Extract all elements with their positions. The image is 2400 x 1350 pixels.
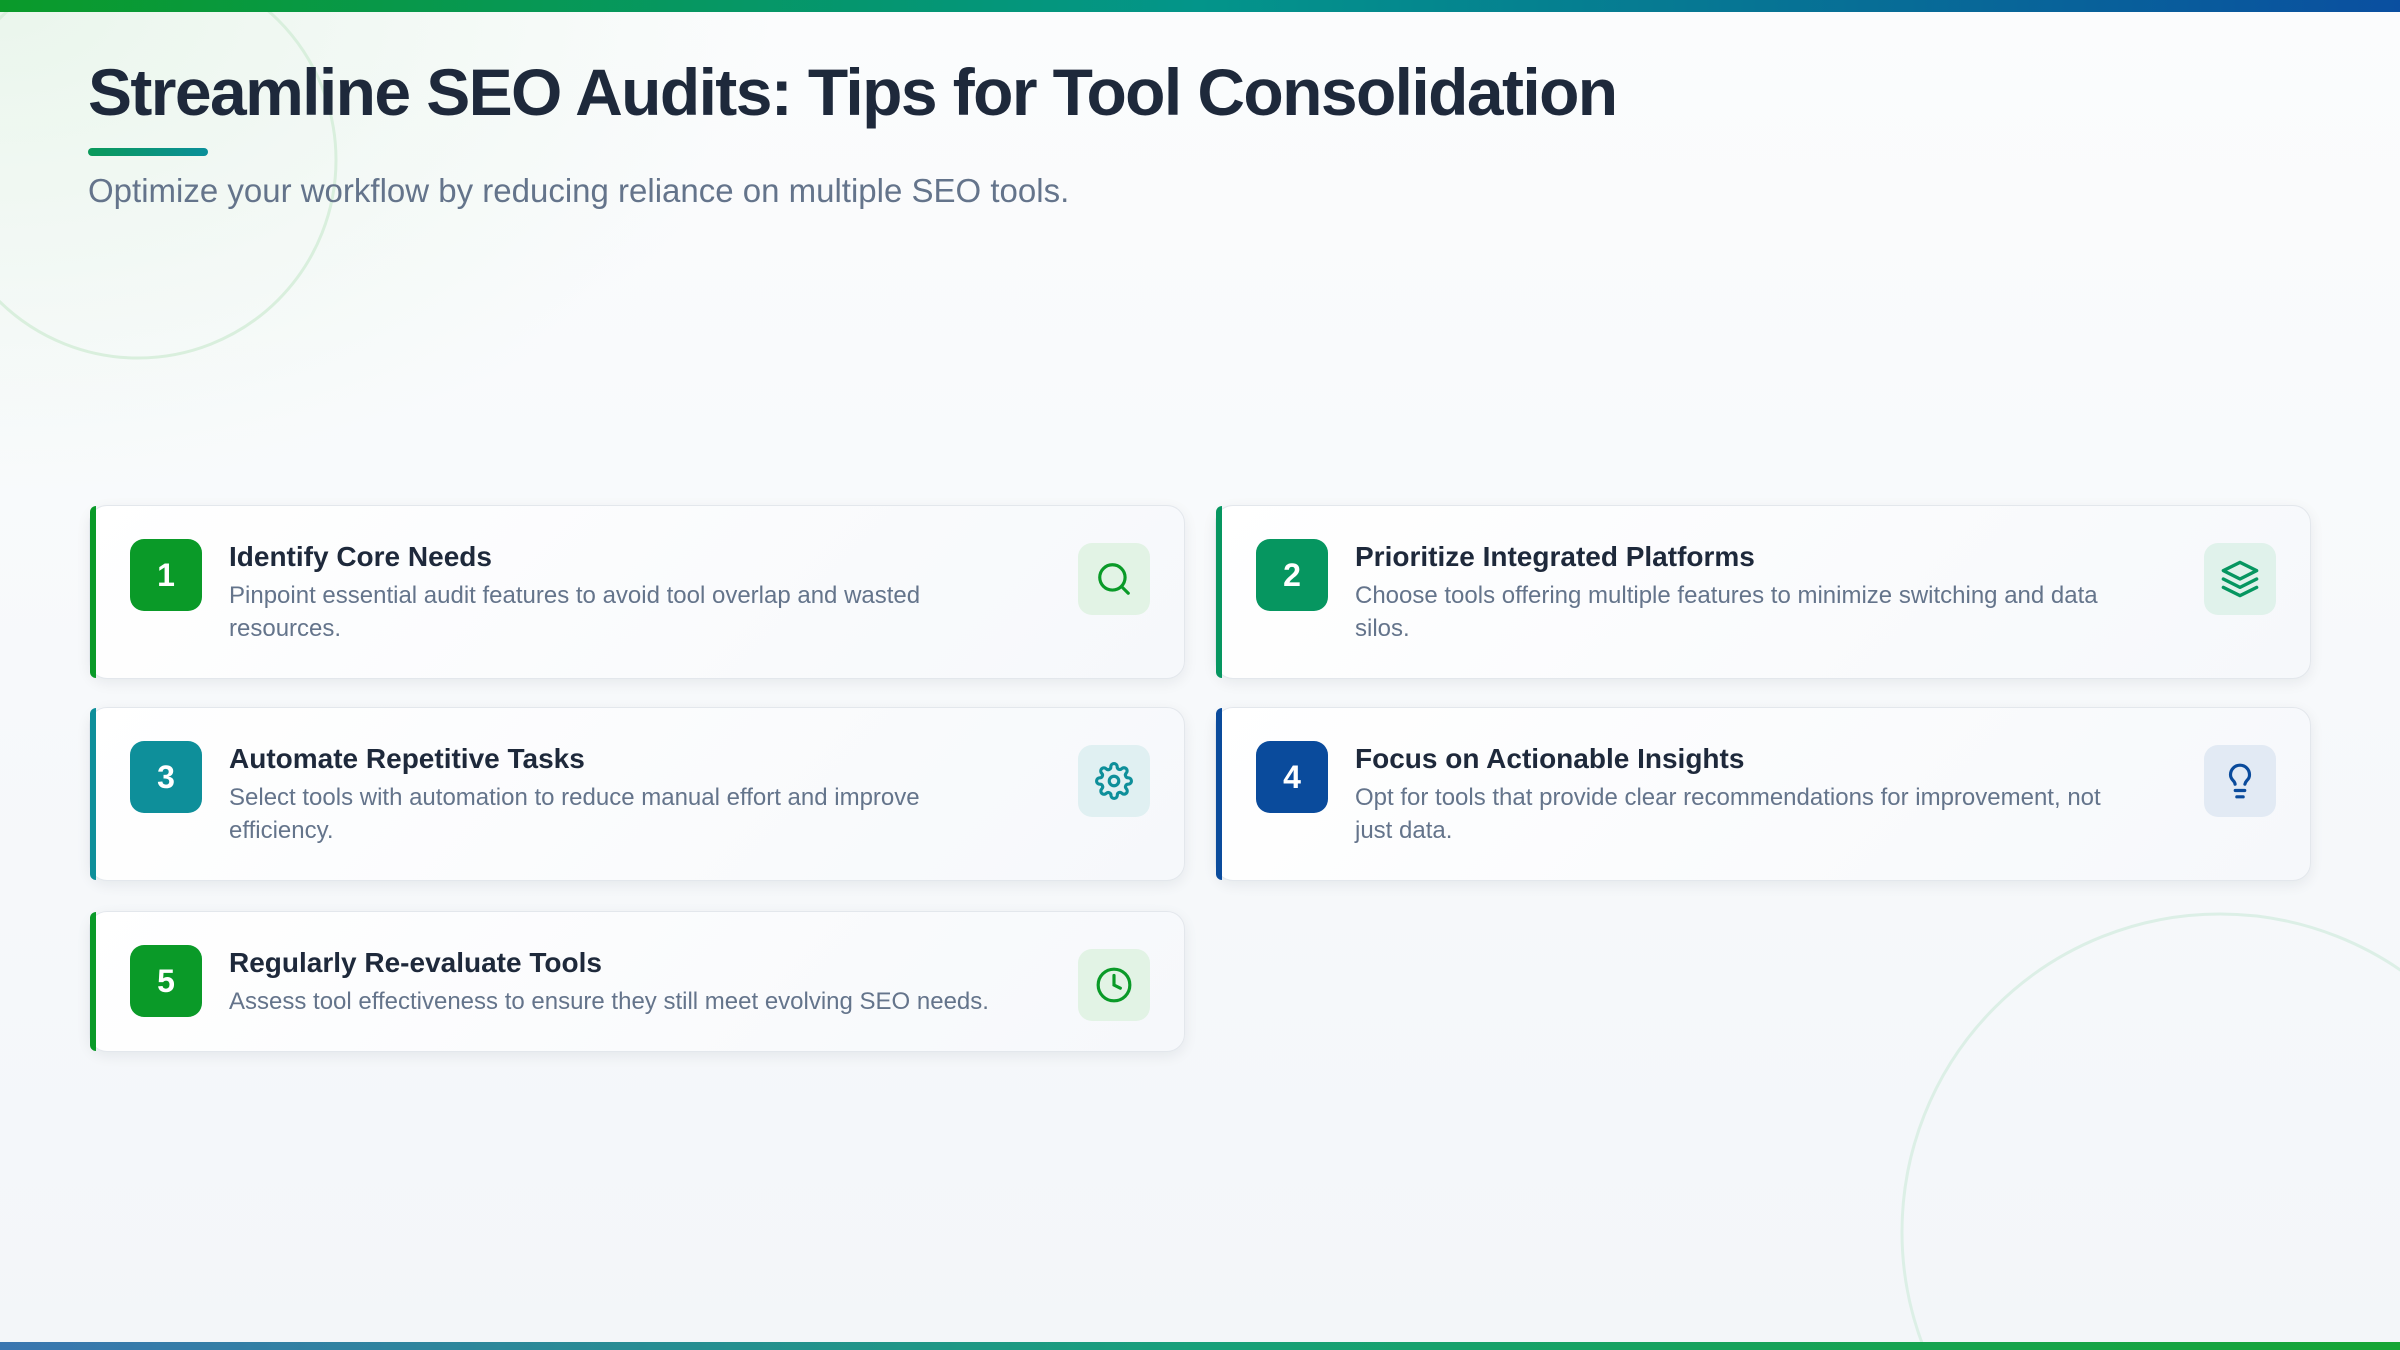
text 5: Regularly Re-evaluate Tools (229, 947, 602, 978)
icon: gear (1078, 745, 1150, 817)
badge 5 (130, 945, 202, 1017)
text 3: Select tools with automation to reduce manual effort and improve (229, 784, 920, 811)
text 5: Assess tool effectiveness to ensure they still meet evolving SEO needs. (229, 988, 989, 1015)
card 4: Focus on Actionable Insights (1215, 707, 2311, 881)
text 2 (1355, 541, 2098, 642)
icon: clock (1078, 949, 1150, 1021)
text 3: efficiency. (229, 817, 334, 844)
card 3: Automate Repetitive Tasks (89, 707, 1185, 881)
text 2: Prioritize Integrated Platforms (1355, 541, 1755, 572)
badge 5: 5 (157, 962, 175, 998)
text 1: Identify Core Needs (229, 541, 492, 572)
text 4: just data. (1355, 817, 1452, 844)
text 3: Automate Repetitive Tasks (229, 743, 585, 774)
icon: layers (2204, 543, 2276, 615)
card 5: Regularly Re-evaluate Tools (89, 911, 1185, 1052)
text 2: Choose tools offering multiple features to minimize switching and data (1355, 582, 2098, 609)
text 1 (229, 541, 920, 642)
badge 1: 1 (157, 556, 175, 592)
icon: search (1078, 543, 1150, 615)
badge 2 (1256, 539, 1328, 611)
badge 1 (130, 539, 202, 611)
text 3 (229, 743, 920, 844)
text 4 (1354, 743, 2101, 844)
subtitle: Optimize your workflow by reducing reliance on multiple SEO tools. (88, 172, 1069, 209)
text 2: silos. (1355, 615, 1410, 642)
badge 4: 4 (1283, 758, 1301, 794)
card 2: Prioritize Integrated Platforms (1215, 505, 2311, 679)
card 1: Identify Core Needs (89, 505, 1185, 679)
text 4: Opt for tools that provide clear recommendations for improvement, not (1355, 784, 2101, 811)
text 1: Pinpoint essential audit features to avoid tool overlap and wasted (229, 582, 920, 609)
badge 4 (1256, 741, 1328, 813)
text 1: resources. (229, 615, 341, 642)
badge 3: 3 (157, 758, 175, 794)
badge 2: 2 (1283, 556, 1301, 592)
badge 3 (130, 741, 202, 813)
text 4: Focus on Actionable Insights (1355, 743, 1744, 774)
text 5 (229, 947, 989, 1015)
title: Streamline SEO Audits: Tips for Tool Consolidation (88, 55, 1617, 129)
icon: lightbulb (2204, 745, 2276, 817)
